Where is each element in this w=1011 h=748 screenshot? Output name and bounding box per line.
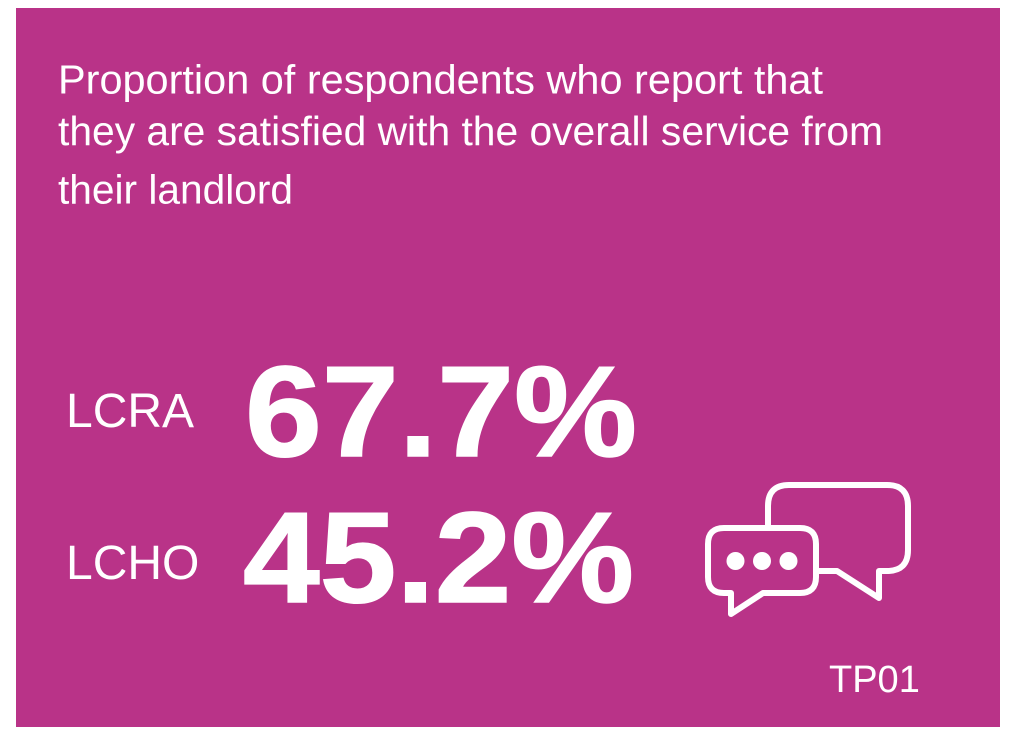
indicator code: TP01 — [829, 659, 920, 701]
label: LCHO: LCHO — [66, 537, 199, 590]
heading: Proportion of respondents who report that — [58, 56, 823, 102]
value: LCRA: 67.7% — [245, 340, 637, 484]
value: LCHO: 45.2% — [243, 486, 634, 630]
label: LCRA: LCRA — [66, 385, 194, 438]
heading: their landlord — [58, 166, 293, 212]
icon: speech bubbles — [708, 485, 908, 614]
heading — [58, 56, 883, 212]
heading: they are satisfied with the overall service from — [58, 108, 883, 154]
